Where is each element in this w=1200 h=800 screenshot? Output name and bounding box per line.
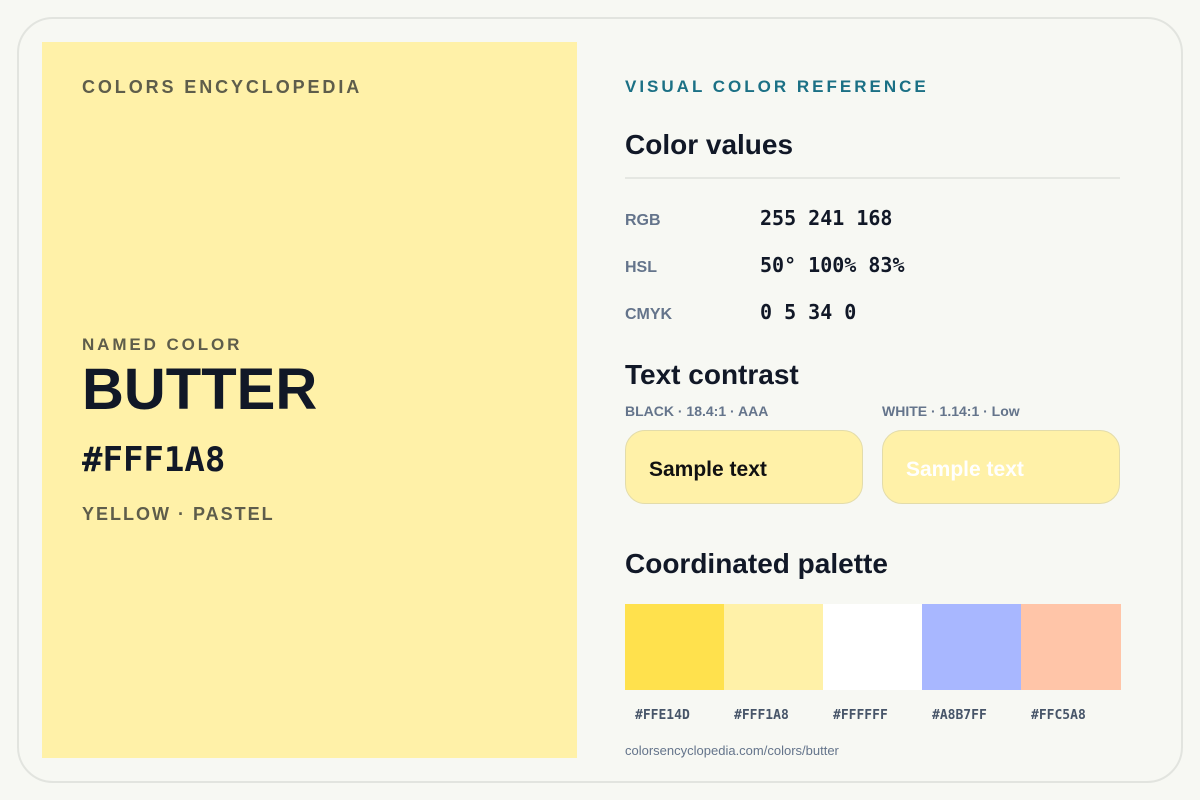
hex FFE14D: #FFE14D	[635, 708, 690, 723]
family tags: YELLOW · PASTEL	[82, 504, 275, 524]
swatch A8B7FF	[922, 604, 1021, 690]
cmyk label: CMYK	[625, 306, 672, 323]
heading: color values: Color values	[625, 129, 793, 160]
heading: text contrast: Text contrast	[625, 359, 799, 390]
panel: color swatch	[42, 42, 577, 758]
swatch FFC5A8	[1021, 604, 1121, 690]
black contrast label: BLACK · 18.4:1 · AAA	[625, 403, 768, 419]
heading: coordinated palette: Coordinated palette	[625, 548, 888, 579]
palette swatches	[625, 604, 1121, 690]
hex FFC5A8: #FFC5A8	[1031, 708, 1086, 723]
source url: colorsencyclopedia.com/colors/butter	[625, 743, 839, 758]
swatch FFF1A8	[724, 604, 823, 690]
rgb label: RGB	[625, 212, 661, 229]
white sample	[882, 430, 1120, 504]
white contrast label: WHITE · 1.14:1 · Low	[882, 403, 1020, 419]
hsl value: 50° 100% 83%	[760, 253, 904, 277]
swatch FFE14D	[625, 604, 724, 690]
palette hex labels	[635, 708, 1086, 723]
hex value: #FFF1A8	[82, 440, 225, 480]
cmyk value: 0 5 34 0	[760, 300, 856, 324]
black sample	[625, 430, 863, 504]
color name: BUTTER	[82, 357, 317, 422]
table: color values	[625, 206, 904, 324]
hex FFF1A8: #FFF1A8	[734, 708, 789, 723]
rgb value: 255 241 168	[760, 206, 892, 230]
brand label: COLORS ENCYCLOPEDIA	[82, 77, 362, 97]
black sample text: Sample text	[649, 458, 767, 481]
swatch FFFFFF	[823, 604, 922, 690]
hsl label: HSL	[625, 259, 657, 276]
named color label: NAMED COLOR	[82, 335, 242, 354]
hex A8B7FF: #A8B7FF	[932, 708, 987, 723]
white sample text: Sample text	[906, 458, 1024, 481]
eyebrow: VISUAL COLOR REFERENCE	[625, 77, 929, 96]
hex FFFFFF: #FFFFFF	[833, 708, 888, 723]
